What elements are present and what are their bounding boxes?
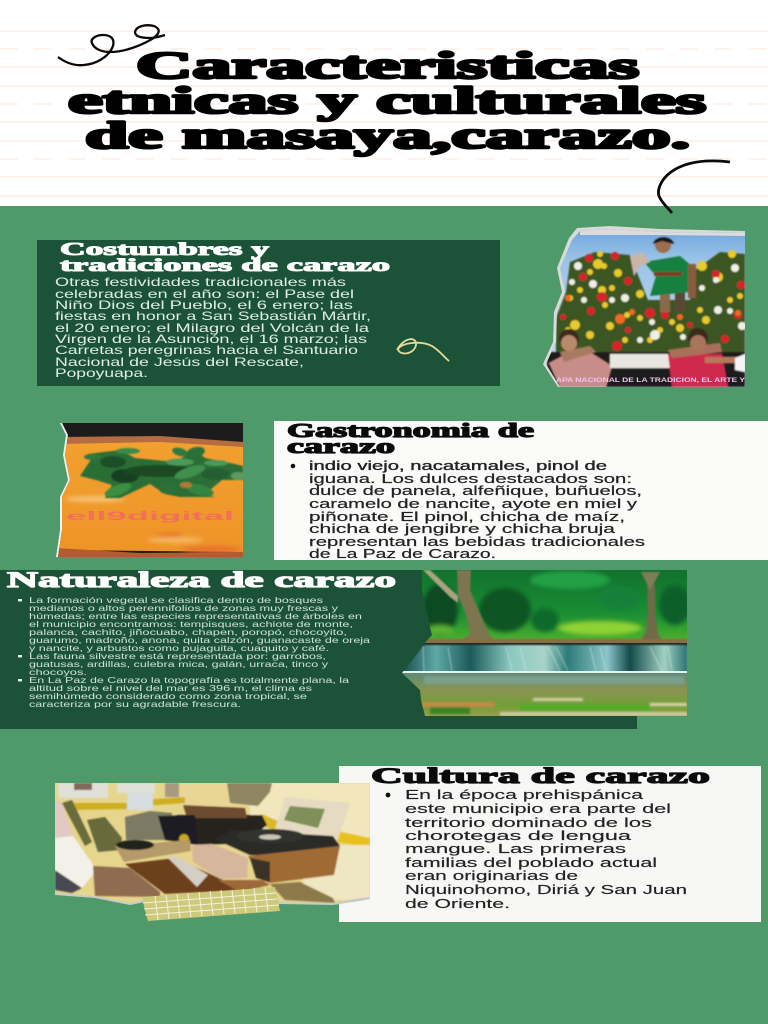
text: cultura body: territorio dominado de los	[405, 815, 653, 830]
heading: gastronomia	[287, 421, 535, 458]
photo: carazo soup dish	[56, 423, 245, 557]
text: costumbres body: Virgen de la Asunción, el 16 marzo; las	[55, 332, 367, 346]
text: cultura body	[405, 787, 687, 911]
bullet	[386, 793, 390, 797]
photo: forest waterfall	[400, 570, 691, 717]
bullets	[18, 599, 22, 681]
text: gastronomia body: caramelo de nancite, ayote en miel y	[309, 496, 638, 511]
text: costumbres body: fiestas en honor a San Sebastián Mártir,	[55, 309, 371, 323]
text: cultura body: En la época prehispánica	[405, 787, 644, 802]
panel: cultura	[339, 763, 761, 922]
heading: gastronomia: carazo	[287, 437, 395, 458]
icon: curved stroke	[658, 161, 730, 213]
heading: costumbres: Costumbres y	[60, 239, 269, 259]
text: cultura body: chorotegas de lengua	[405, 828, 632, 843]
text: costumbres body: celebradas en el año son: el Pase del	[55, 287, 354, 301]
text: naturaleza body: medianos o altos perennifolios de zonas muy frescas y	[29, 604, 338, 613]
text: gastronomia body: piñonate. El pinol, chicha de maíz,	[309, 509, 625, 524]
text: cultura body: de Oriente.	[405, 896, 510, 911]
text: cultura body: este municipio era parte del	[405, 801, 671, 816]
text: gastronomia body: iguana. Los dulces destacados son:	[309, 471, 632, 486]
text: costumbres body: Niño Dios del Pueblo, el 6 enero; las	[55, 298, 353, 312]
text: naturaleza body: semihúmedo considerado como zona tropical, se	[29, 692, 308, 701]
panel: costumbres y tradiciones	[37, 239, 500, 386]
text: naturaleza body: húmedas; entre las especies representativas de árboles en	[29, 612, 362, 621]
text: naturaleza body: Las fauna silvestre está representada por: garrobos,	[29, 652, 326, 661]
text: naturaleza body: En La Paz de Carazo la topografía es totalmente plana, la	[29, 676, 350, 685]
text: costumbres body: el 20 enero; el Milagro del Volcán de la	[55, 321, 370, 335]
text: cultura body: familias del poblado actual	[405, 855, 657, 870]
caption text in photo: APA NACIONAL DE LA TRADICION, EL ARTE Y	[556, 377, 746, 384]
text: naturaleza body: y nancite, y arbustos como pujaguita, cuaquito y café.	[29, 644, 329, 653]
text: costumbres body: Otras festividades tradicionales más	[55, 275, 346, 289]
text: costumbres body	[55, 275, 371, 380]
photo: museum objects with record player	[55, 783, 370, 905]
text: naturaleza body: caracteriza por su agradable frescura.	[29, 700, 241, 709]
title: Caracteristicas	[136, 45, 639, 87]
text: cultura body: eran originarias de	[405, 868, 578, 883]
text: naturaleza body: La formación vegetal se clasifica dentro de bosques	[29, 596, 323, 605]
text: gastronomia body: chicha de jengibre y chicha bruja	[309, 521, 616, 536]
text: gastronomia body: de La Paz de Carazo.	[309, 546, 496, 561]
washi tape	[142, 887, 280, 921]
bullet	[291, 464, 295, 468]
icon: swirl doodle	[58, 25, 165, 65]
heading: gastronomia: Gastronomia de	[287, 421, 535, 442]
text: naturaleza body: chocoyos.	[29, 668, 87, 677]
text: gastronomia body: representan las bebidas tradicionales	[309, 534, 646, 549]
icon: small yellow squiggle	[397, 339, 449, 361]
text: naturaleza body: guarumo, madroño, anona, quita calzón, guanacaste de oreja	[29, 636, 371, 645]
text: gastronomia body: indio viejo, nacatamales, pinol de	[309, 458, 607, 473]
panel: gastronomia	[274, 421, 768, 561]
text: cultura body: Niquinohomo, Diriá y San Juan	[405, 882, 687, 897]
text: naturaleza body: palanca, cachito, jiñocuabo, chapen, poropó, chocoyito,	[29, 628, 347, 637]
photo: procession statue with flowers	[543, 226, 746, 387]
green background	[0, 206, 768, 1024]
title	[68, 45, 706, 157]
heading: costumbres	[60, 239, 391, 275]
heading: naturaleza: Naturaleza de carazo	[7, 567, 396, 592]
text: naturaleza body	[29, 596, 371, 709]
title: de masaya,carazo.	[85, 115, 690, 157]
panel: naturaleza	[0, 567, 637, 729]
header paper background	[0, 0, 768, 206]
text: naturaleza body: guatusas, ardillas, culebra mica, galán, urraca, tinco y	[29, 660, 328, 669]
text: costumbres body: Carretas peregrinas hacia el Santuario	[55, 343, 359, 357]
watermark text: ell9digital	[66, 511, 234, 523]
title: etnicas y culturales	[68, 80, 706, 122]
text: naturaleza body: el municipio encontramos: tempisques, achiote de monte,	[29, 620, 353, 629]
heading: costumbres: tradiciones de carazo	[60, 255, 391, 275]
text: gastronomia body: dulce de panela, alfeñique, buñuelos,	[309, 483, 642, 498]
text: gastronomia body	[309, 458, 646, 561]
heading: cultura: Cultura de carazo	[371, 763, 710, 788]
text: cultura body: mangue. Las primeras	[405, 841, 627, 856]
text: costumbres body: Popoyuapa.	[55, 366, 148, 380]
text: costumbres body: Nacional de Jesús del Rescate,	[55, 355, 304, 369]
text: naturaleza body: altitud sobre el nivel del mar es 396 m, el clima es	[29, 684, 312, 693]
